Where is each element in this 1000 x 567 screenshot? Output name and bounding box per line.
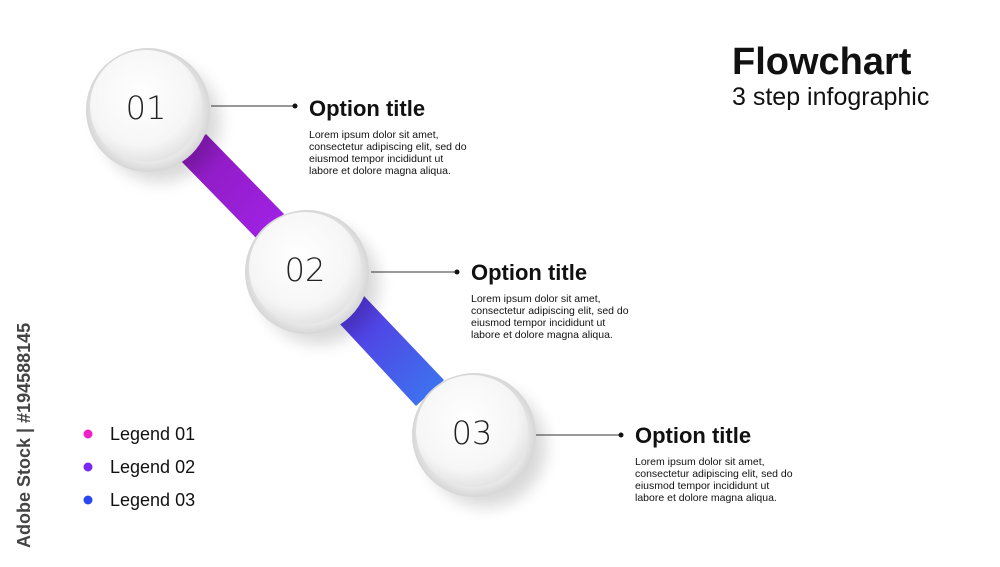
text block 1: Option title [309,96,425,121]
text block 1: eiusmod tempor incididunt ut [309,153,443,165]
text block 2 [471,260,629,341]
text block 3: labore et dolore magna aliqua. [635,492,777,504]
text block 2: eiusmod tempor incididunt ut [471,317,605,329]
text block 1: consectetur adipiscing elit, sed do [309,141,467,153]
text block 3: Lorem ipsum dolor sit amet, [635,456,765,468]
text block 2: labore et dolore magna aliqua. [471,329,613,341]
title: 3 step infographic [732,83,929,111]
step 01 circle [86,48,220,182]
legend: Legend 01 [110,424,195,444]
title [732,41,929,111]
text block 1: Lorem ipsum dolor sit amet, [309,129,439,141]
text block 1 [309,96,467,177]
text block 2: Option title [471,260,587,285]
text block 1: labore et dolore magna aliqua. [309,165,451,177]
legend: Legend 02 [110,457,195,477]
connector bar 1 [180,134,284,240]
callout line 2 [371,270,460,274]
text block 3: eiusmod tempor incididunt ut [635,480,769,492]
connector bar 2 [338,296,444,406]
title: Flowchart [732,41,912,83]
text block 3: Option title [635,423,751,448]
step 03 circle [412,373,546,507]
text block 3: consectetur adipiscing elit, sed do [635,468,793,480]
watermark side text: Adobe Stock | #194588145 [14,323,34,548]
step 03 circle: 03 [452,414,492,452]
step 02 circle [245,210,379,344]
text block 2: Lorem ipsum dolor sit amet, [471,293,601,305]
legend [84,424,195,510]
step 02 circle: 02 [285,251,325,289]
legend: Legend 03 [110,490,195,510]
callout line 3 [536,432,624,438]
text block 2: consectetur adipiscing elit, sed do [471,305,629,317]
callout line 1 [211,104,298,108]
text block 3 [635,423,793,504]
step 01 circle: 01 [126,89,166,127]
